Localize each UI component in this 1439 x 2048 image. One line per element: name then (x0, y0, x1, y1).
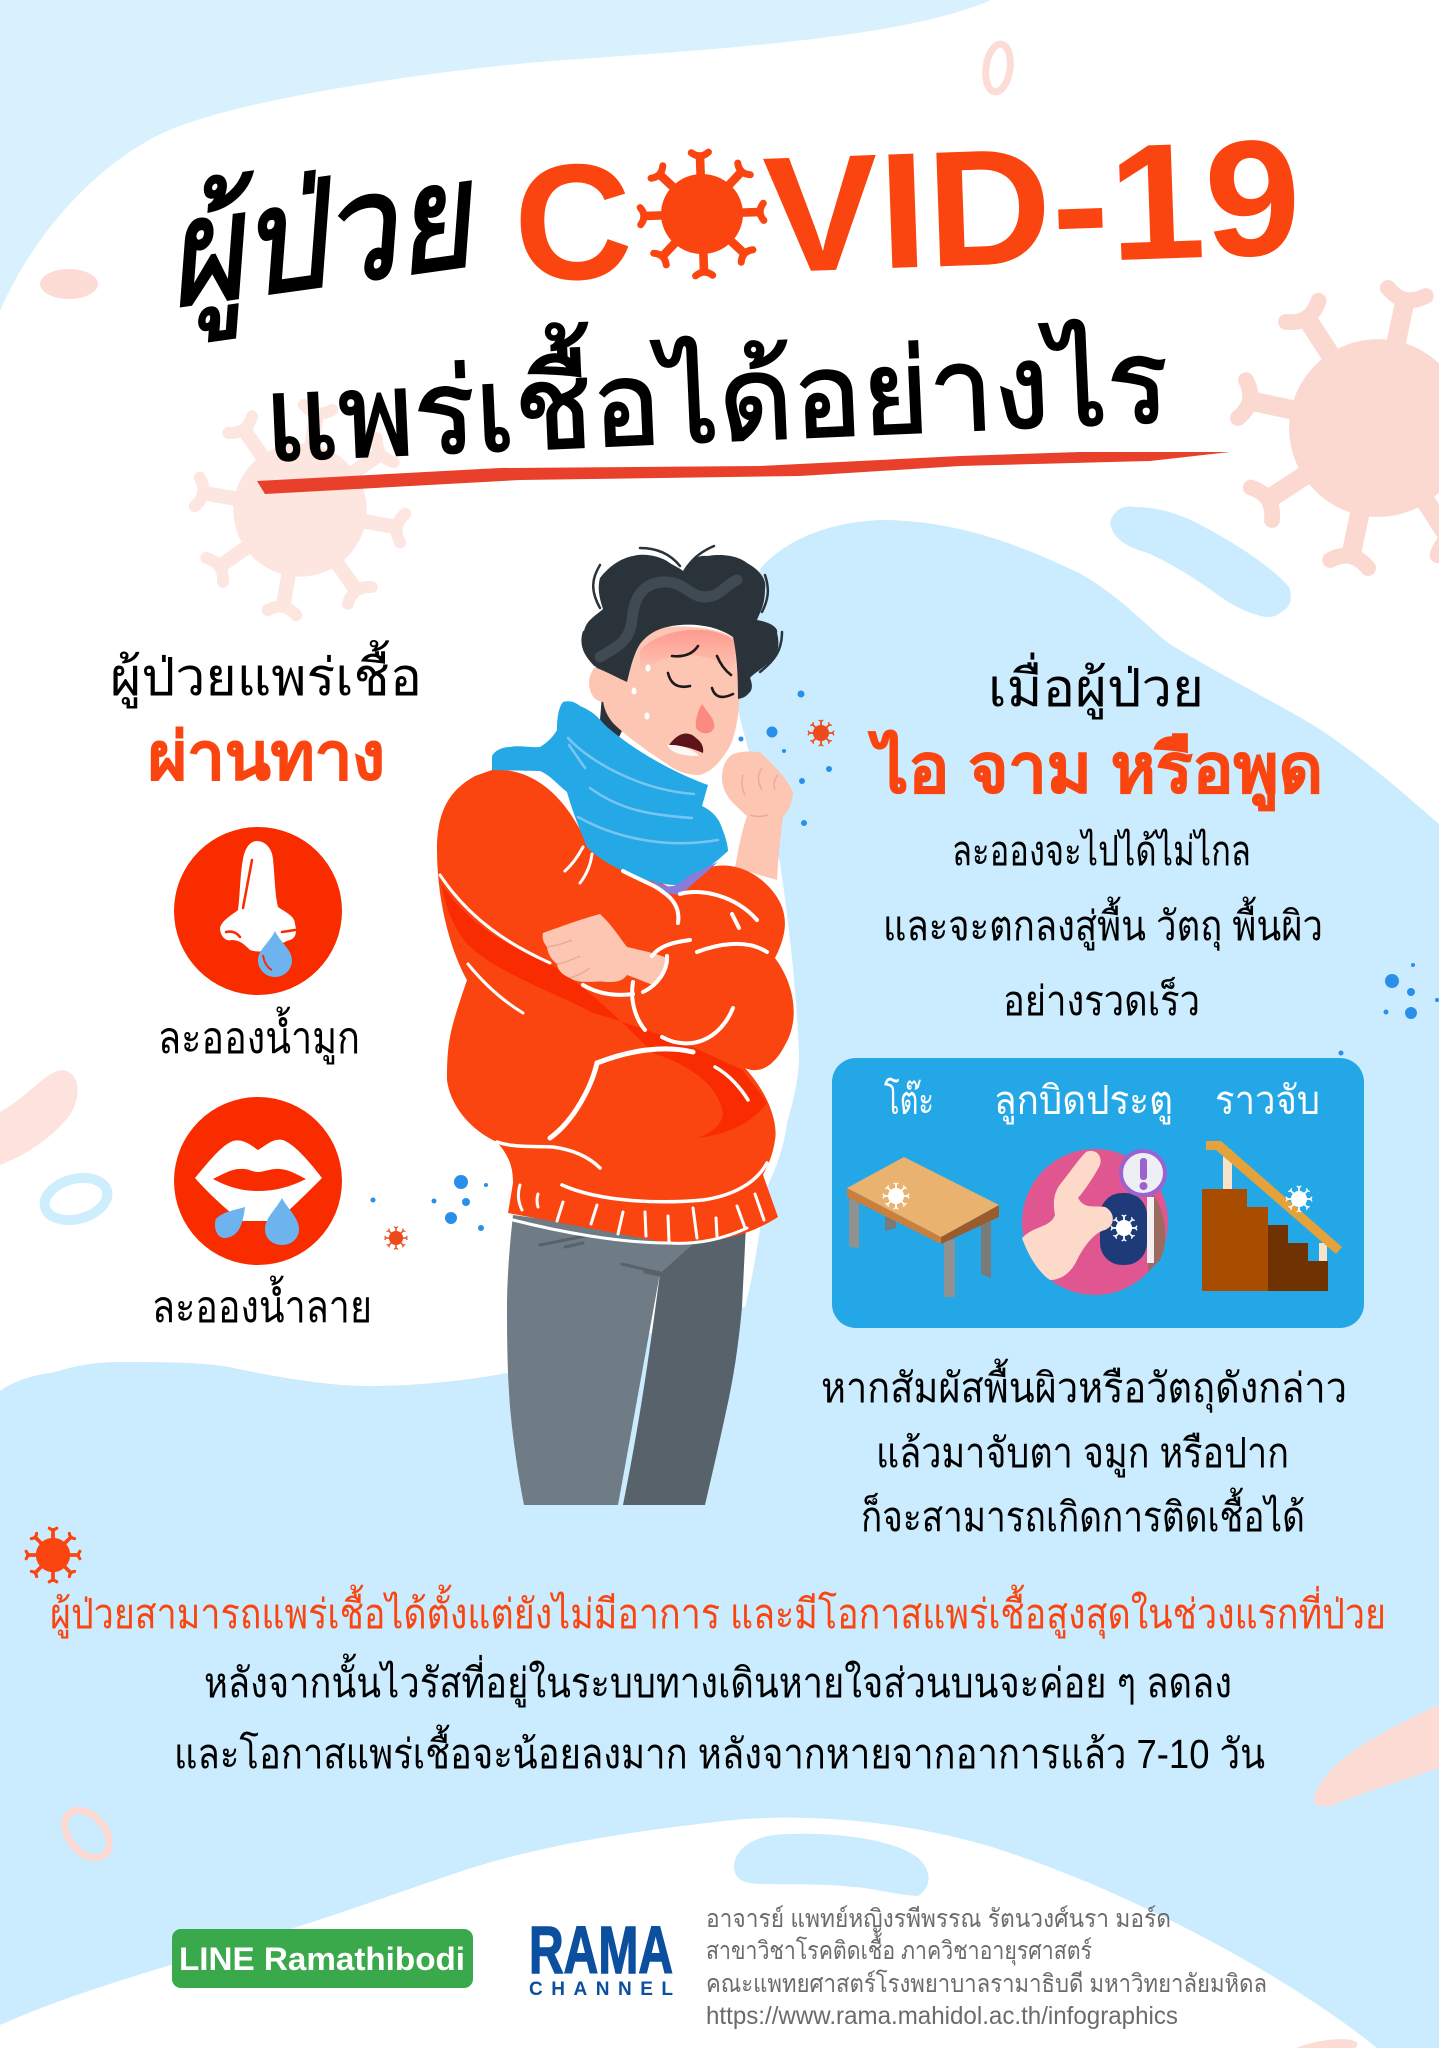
text: touching surfaces warning (821, 1358, 1347, 1540)
background: pink blob right (1314, 1705, 1439, 1806)
text: credits (706, 1905, 1267, 2030)
text: transmission details: และโอกาสแพร่เชื้อจะน้อยลงมาก หลังจากหายจากอาการแล้ว 7-10 วัน (174, 1724, 1265, 1777)
background: upper right blue blob (1110, 506, 1291, 617)
title underline brush stroke (257, 452, 1230, 494)
icon: small virus lower left (385, 1227, 407, 1249)
logo: RAMA Channel: RAMA (529, 1913, 673, 1988)
icon: virus above note (26, 1528, 80, 1582)
title: COVID-19 (511, 105, 1304, 316)
text: touching surfaces warning: แล้วมาจับตา จมูก หรือปาก (876, 1430, 1289, 1478)
sleeve hand (543, 914, 667, 985)
teeth (667, 745, 699, 756)
eyebrows and eyes (668, 646, 733, 697)
icon: virus as letter O (638, 150, 766, 278)
panel labels: โต๊ะ (884, 1078, 934, 1123)
collar sliver (652, 862, 718, 895)
icon: door knob (1022, 1149, 1168, 1295)
left heading (110, 640, 422, 793)
text: droplet behaviour (883, 828, 1323, 1024)
background: pink oval left (40, 269, 98, 299)
icon: stair railing (1202, 1141, 1342, 1291)
badge: LINE Ramathibodi: LINE Ramathibodi (179, 1941, 465, 1977)
nose (696, 704, 714, 733)
hair behind neck (600, 695, 625, 745)
icon: nose with droplet (174, 827, 342, 995)
panel labels (884, 1078, 1320, 1124)
background: pink ring top (983, 43, 1013, 93)
scarf (492, 701, 728, 885)
pants (507, 1215, 746, 1505)
icon: small virus near fist (808, 720, 834, 746)
panel: contaminated surfaces (832, 1058, 1364, 1328)
title: second line: แพร่เชื้อได้อย่างไร (261, 297, 1171, 487)
text: touching surfaces warning: ก็จะสามารถเกิดการติดเชื้อได้ (861, 1487, 1305, 1540)
droplets right edge (1338, 963, 1439, 1056)
background: top-left blue blob (0, 0, 991, 311)
mouth (669, 734, 703, 753)
background: pink blob left (0, 1070, 78, 1165)
hair highlight (600, 580, 737, 657)
text: droplet behaviour: ละอองจะไปได้ไม่ไกล (952, 828, 1251, 874)
panel labels: ลูกบิดประตู (994, 1079, 1173, 1124)
text: touching surfaces warning: หากสัมผัสพื้นผิวหรือวัตถุดังกล่าว (821, 1358, 1347, 1413)
panel labels: ราวจับ (1215, 1079, 1320, 1123)
sweater shadow (442, 885, 767, 1138)
droplets lower left (370, 1175, 488, 1231)
text: transmission details (174, 1653, 1265, 1777)
icon: lips with droplets (174, 1097, 342, 1265)
title: COVID-19: VID-19 (761, 105, 1304, 307)
background: large virus left (179, 389, 421, 631)
background: pink ring bottom left (56, 1802, 118, 1866)
text: droplet behaviour: อย่างรวดเร็ว (1003, 977, 1200, 1024)
title: COVID-19: C (511, 128, 635, 316)
text: credits: สาขาวิชาโรคติดเชื้อ ภาควิชาอายุรศาสตร์ (706, 1932, 1092, 1966)
text: droplet behaviour: และจะตกลงสู่พื้น วัตถุ พื้นผิว (883, 896, 1323, 951)
left heading: ผู้ป่วยแพร่เชื้อ (110, 640, 422, 709)
logo: RAMA Channel (529, 1913, 673, 2000)
raised arm and fist (722, 752, 793, 880)
badge: LINE Ramathibodi (172, 1929, 473, 1988)
background: blue ring left (40, 1171, 112, 1227)
forehead flush (640, 630, 736, 672)
text: credits: คณะแพทยศาสตร์โรงพยาบาลรามาธิบดี มหาวิทยาลัยมหิดล (706, 1969, 1267, 1998)
label: nasal droplets: ละอองน้ำมูก (158, 1006, 360, 1065)
right heading: ไอ จาม หรือพูด (868, 729, 1323, 812)
text: transmission details: หลังจากนั้นไวรัสที่อยู่ในระบบทางเดินหายใจส่วนบนจะค่อย ๆ ลดลง (204, 1653, 1232, 1708)
title: handwritten word: ผู้ป่วย (154, 132, 487, 346)
hair flyaways (583, 546, 782, 672)
background: large virus right (1213, 263, 1439, 593)
text: credits: อาจารย์ แพทย์หญิงรพีพรรณ รัตนวงศ์นรา มอร์ด (706, 1905, 1171, 1933)
right heading (868, 652, 1323, 812)
sweat drops (632, 664, 650, 720)
sweater (437, 770, 794, 1243)
left heading: ผ่านทาง (148, 719, 385, 793)
label: saliva droplets: ละอองน้ำลาย (152, 1275, 372, 1332)
logo: RAMA Channel: CHANNEL (529, 1979, 673, 2000)
ear (589, 664, 617, 702)
man illustration (437, 546, 794, 1505)
right heading: เมื่อผู้ป่วย (988, 652, 1204, 720)
text: credits: https://www.rama.mahidol.ac.th/infographics (706, 2002, 1178, 2030)
droplets near fist (738, 690, 832, 826)
face (603, 626, 741, 775)
hair (583, 555, 778, 699)
sweater highlights (440, 847, 767, 1243)
icon: table (847, 1157, 999, 1297)
background: centre and lower blue area (0, 520, 1439, 2048)
background: small blue blob in white arch (734, 1834, 929, 1896)
background: pink blob bottom right (1285, 2035, 1359, 2048)
